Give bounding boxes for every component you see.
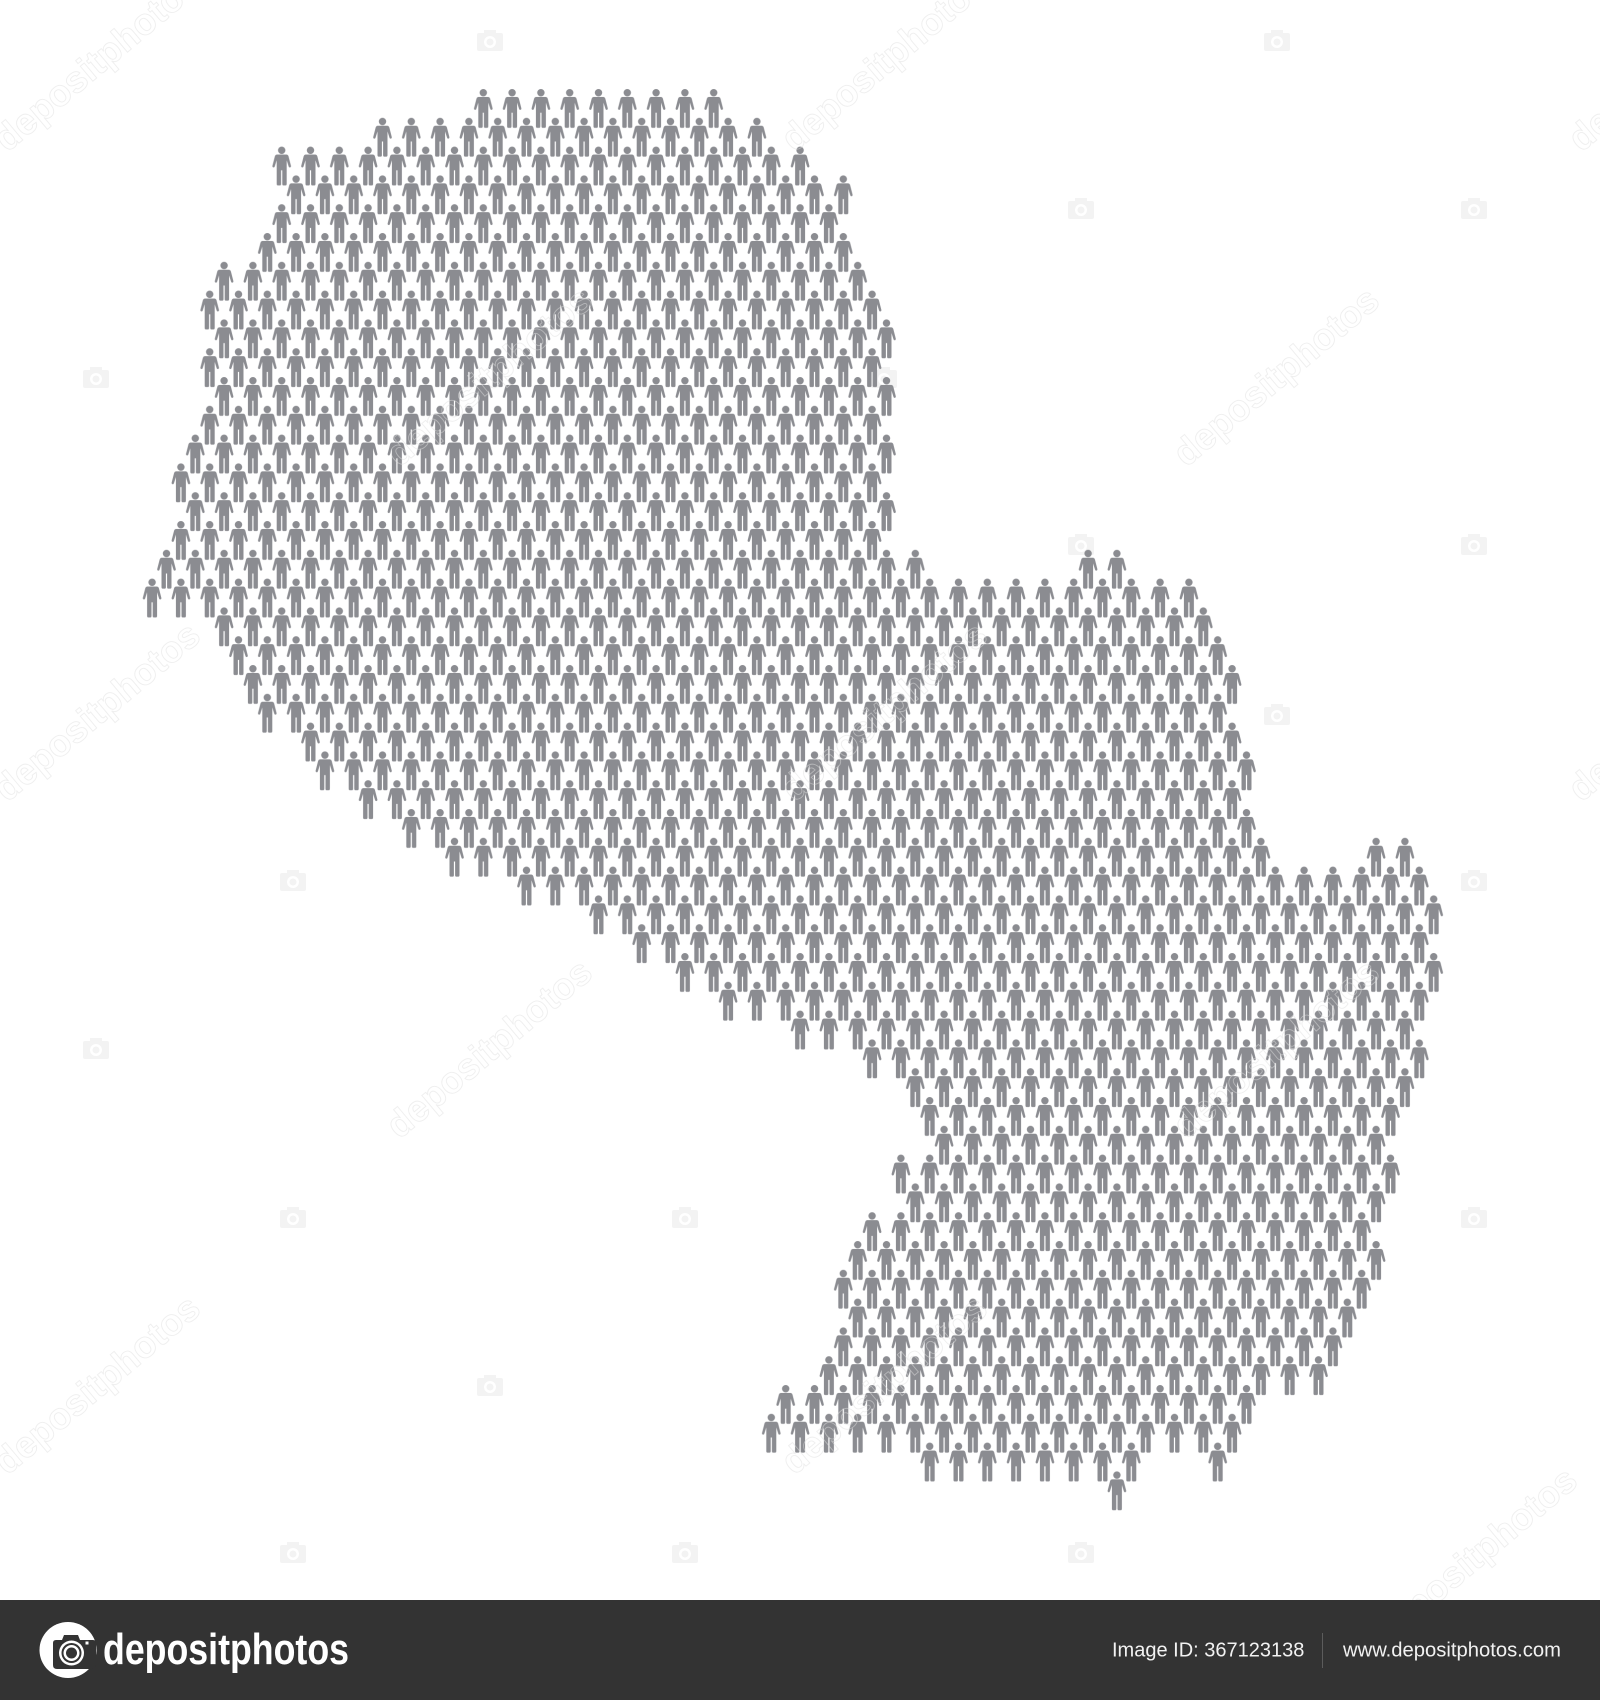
icon: depositphotos camera logo: [40, 1622, 96, 1678]
image id text: Image ID: 367123138: [1112, 1640, 1304, 1662]
website url text: www.depositphotos.com: [1342, 1640, 1561, 1662]
southern and eastern rows of people: [138, 549, 1448, 1511]
northern lobe rows of people: [166, 88, 901, 561]
watermark: camera icons: [83, 30, 1487, 1563]
watermark: diagonal depositphotos text: depositphotos: [1165, 951, 1387, 1146]
divider: [1322, 1633, 1323, 1668]
watermark: diagonal depositphotos text: depositphotos: [773, 614, 995, 809]
logo wordmark: depositphotos: [103, 1625, 349, 1674]
watermark: diagonal depositphotos text: depositphotos: [378, 279, 600, 474]
pictogram map of Paraguay made of standing people: [138, 88, 1448, 1511]
footer bar: [0, 1600, 1600, 1700]
watermark: diagonal depositphotos text: depositphotos: [378, 951, 600, 1146]
watermark: diagonal depositphotos text: depositphotos: [1363, 1459, 1585, 1654]
watermark: diagonal depositphotos text: depositphotos: [773, 1287, 995, 1482]
watermark: diagonal depositphotos text: depositphotos: [1165, 279, 1387, 474]
